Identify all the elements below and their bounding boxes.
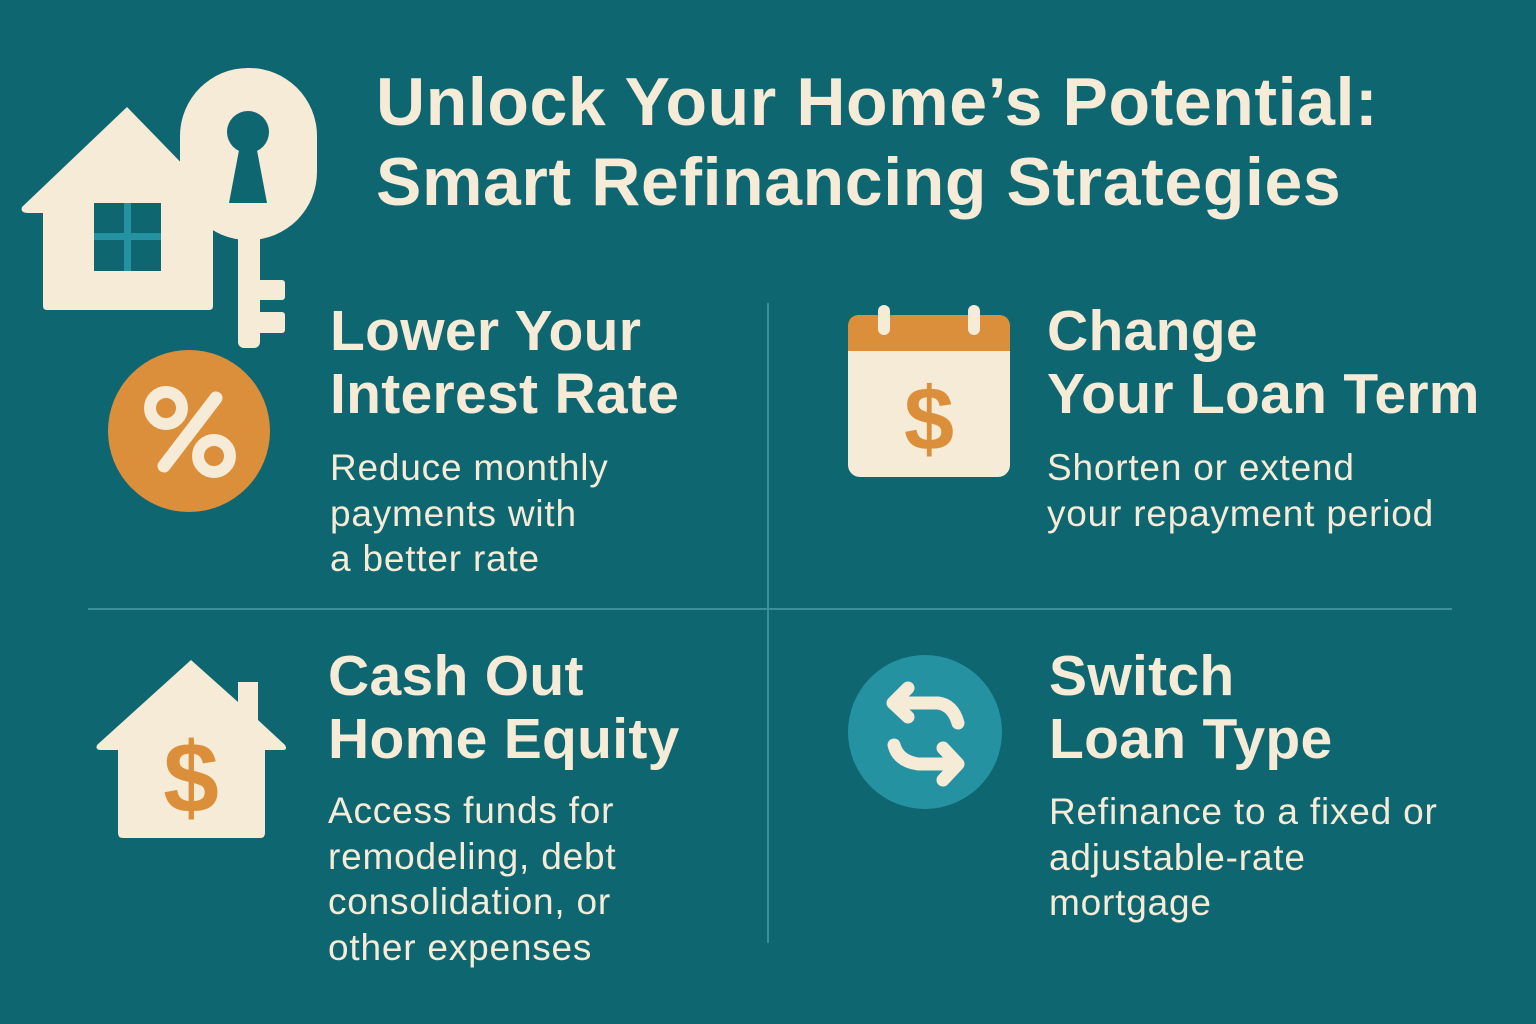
body text: adjustable-rate xyxy=(1049,836,1306,878)
body text xyxy=(330,447,609,579)
heading: Interest Rate xyxy=(330,362,679,426)
title: Smart Refinancing Strategies xyxy=(376,144,1341,220)
title xyxy=(376,64,1378,220)
heading: Home Equity xyxy=(328,707,680,771)
heading: Switch xyxy=(1049,644,1234,708)
title: Unlock Your Home’s Potential: xyxy=(376,64,1378,140)
panel: switch loan type xyxy=(848,644,1438,923)
heading xyxy=(330,299,679,426)
body text: payments with xyxy=(330,492,577,534)
heading: Lower Your xyxy=(330,299,641,363)
body text: remodeling, debt xyxy=(328,836,616,876)
icon: calendar: $ xyxy=(904,370,954,470)
body text xyxy=(1047,447,1434,534)
body text: Reduce monthly xyxy=(330,447,609,488)
panel: lower interest rate xyxy=(108,299,679,579)
body text: your repayment period xyxy=(1047,492,1434,534)
icon: percent xyxy=(108,350,270,512)
heading: Loan Type xyxy=(1049,707,1332,771)
heading: Your Loan Term xyxy=(1047,362,1480,426)
panel: cash out home equity xyxy=(96,644,680,968)
heading xyxy=(328,644,680,771)
body text xyxy=(328,790,616,968)
body text: Refinance to a fixed or xyxy=(1049,791,1438,832)
heading xyxy=(1049,644,1332,771)
icon: house with dollar xyxy=(96,660,286,838)
body text: other expenses xyxy=(328,926,592,968)
panel: change loan term xyxy=(848,299,1480,534)
body text xyxy=(1049,791,1438,923)
icon: house with dollar: $ xyxy=(163,722,219,834)
body text: mortgage xyxy=(1049,882,1212,923)
body text: Shorten or extend xyxy=(1047,447,1355,488)
heading xyxy=(1047,299,1480,426)
icon: switch arrows xyxy=(848,655,1002,809)
body text: Access funds for xyxy=(328,790,614,831)
icon: calendar xyxy=(848,305,1010,477)
icon: house and key xyxy=(22,68,317,348)
body text: consolidation, or xyxy=(328,881,611,922)
body text: a better rate xyxy=(330,538,540,579)
heading: Cash Out xyxy=(328,644,584,708)
heading: Change xyxy=(1047,299,1258,363)
